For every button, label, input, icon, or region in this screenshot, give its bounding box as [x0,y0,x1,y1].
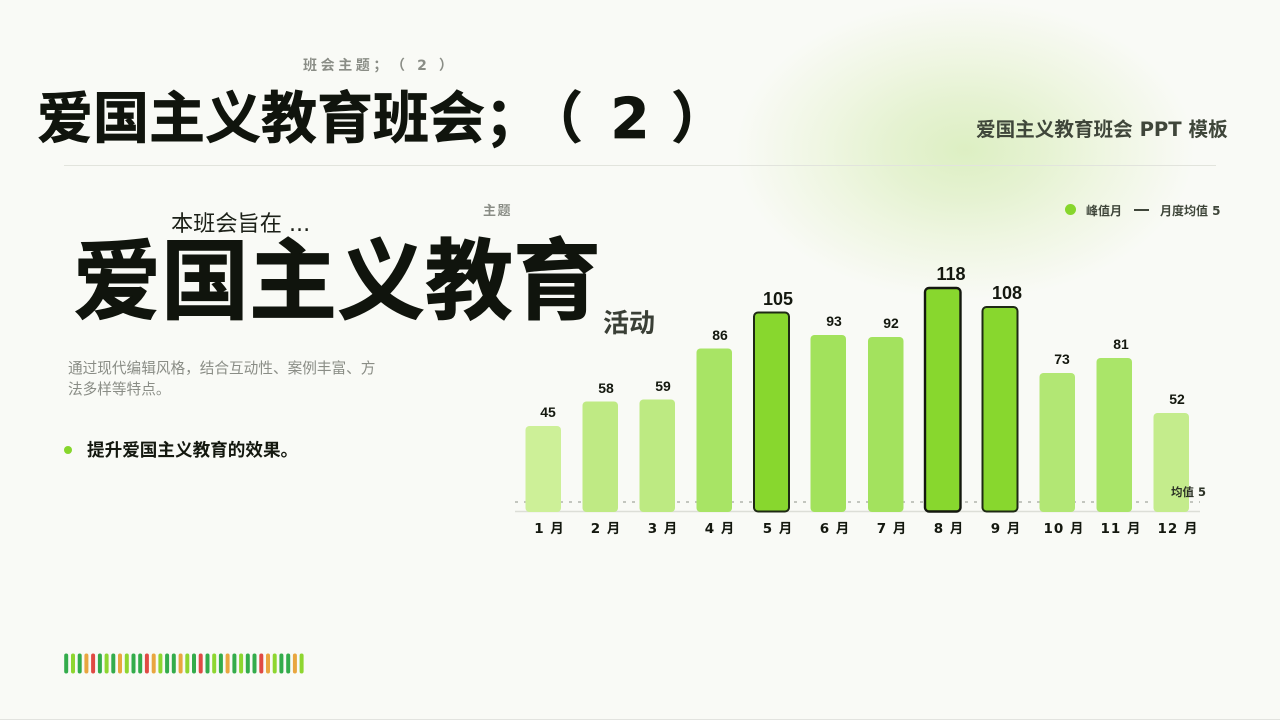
eyebrow label: 班会主题；（ 2 ） [303,58,456,74]
bar: October: 73 [1054,351,1070,367]
bar: January [526,404,561,512]
background green glow [735,0,1195,300]
bullet point [64,440,298,461]
bar: April [696,327,732,512]
legend text: monthly mean: 月度均值 5 [1160,204,1221,218]
bar: July: 92 [883,315,899,331]
bar: June: 93 [826,313,842,329]
axis baseline [515,510,1200,512]
bar: January: 45 [540,404,556,420]
bar: December: 52 [1169,391,1185,407]
bar: August (peak) [925,264,966,512]
bullet text: 提升爱国主义教育的效果。 [87,441,298,461]
header divider [64,165,1216,166]
bar: September (peak): 108 [992,283,1022,303]
bar: November [1096,336,1132,512]
bar: April: 86 [712,327,728,343]
mean line [515,501,1200,503]
bar: March [640,378,675,512]
month labels [534,521,1198,537]
description: 通过现代编辑风格，结合互动性、案例丰富、方法多样等特点。 [68,360,375,398]
mean label: 均值 5 [1171,485,1206,499]
month labels: 11 月 [1100,521,1142,537]
month labels: 5 月 [763,521,793,537]
bar: May (peak): 105 [763,289,793,309]
month labels: 12 月 [1158,521,1198,537]
title: 爱国主义教育班会；（ 2 ） [37,87,727,152]
small label: theme: 主题 [483,204,512,219]
bar: March: 59 [655,378,671,394]
bar: September (peak) [982,283,1022,512]
bar: November: 81 [1113,336,1129,352]
month labels: 3 月 [648,521,678,537]
legend marker: peak month [1065,204,1076,215]
bar: October [1040,351,1075,512]
page edge lines [0,719,1280,720]
bar: February: 58 [598,380,614,396]
bar: June [810,313,846,512]
hero heading: 爱国主义教育 [73,230,601,333]
legend [1065,204,1221,218]
month labels: 10 月 [1044,521,1084,537]
month labels: 1 月 [534,521,565,537]
month labels: 8 月 [934,521,964,537]
month labels: 7 月 [877,521,907,537]
month labels: 2 月 [591,521,621,537]
legend marker: monthly mean [1134,209,1149,211]
bar: December [1154,391,1189,512]
bar: July [868,315,904,512]
month labels: 9 月 [991,521,1021,537]
hero suffix: 活动 [603,309,655,339]
bar: May (peak) [754,289,793,512]
colour tick strip [64,654,304,674]
legend text: peak month: 峰值月 [1086,204,1122,218]
month labels: 4 月 [705,521,735,537]
bar: August (peak): 118 [936,264,966,284]
subtitle: template name: 爱国主义教育班会 PPT 模板 [976,118,1228,141]
month labels: 6 月 [820,521,850,537]
bullet dot [64,446,72,454]
lead-in text: 本班会旨在 ... [171,211,310,237]
bar: February [582,380,618,512]
